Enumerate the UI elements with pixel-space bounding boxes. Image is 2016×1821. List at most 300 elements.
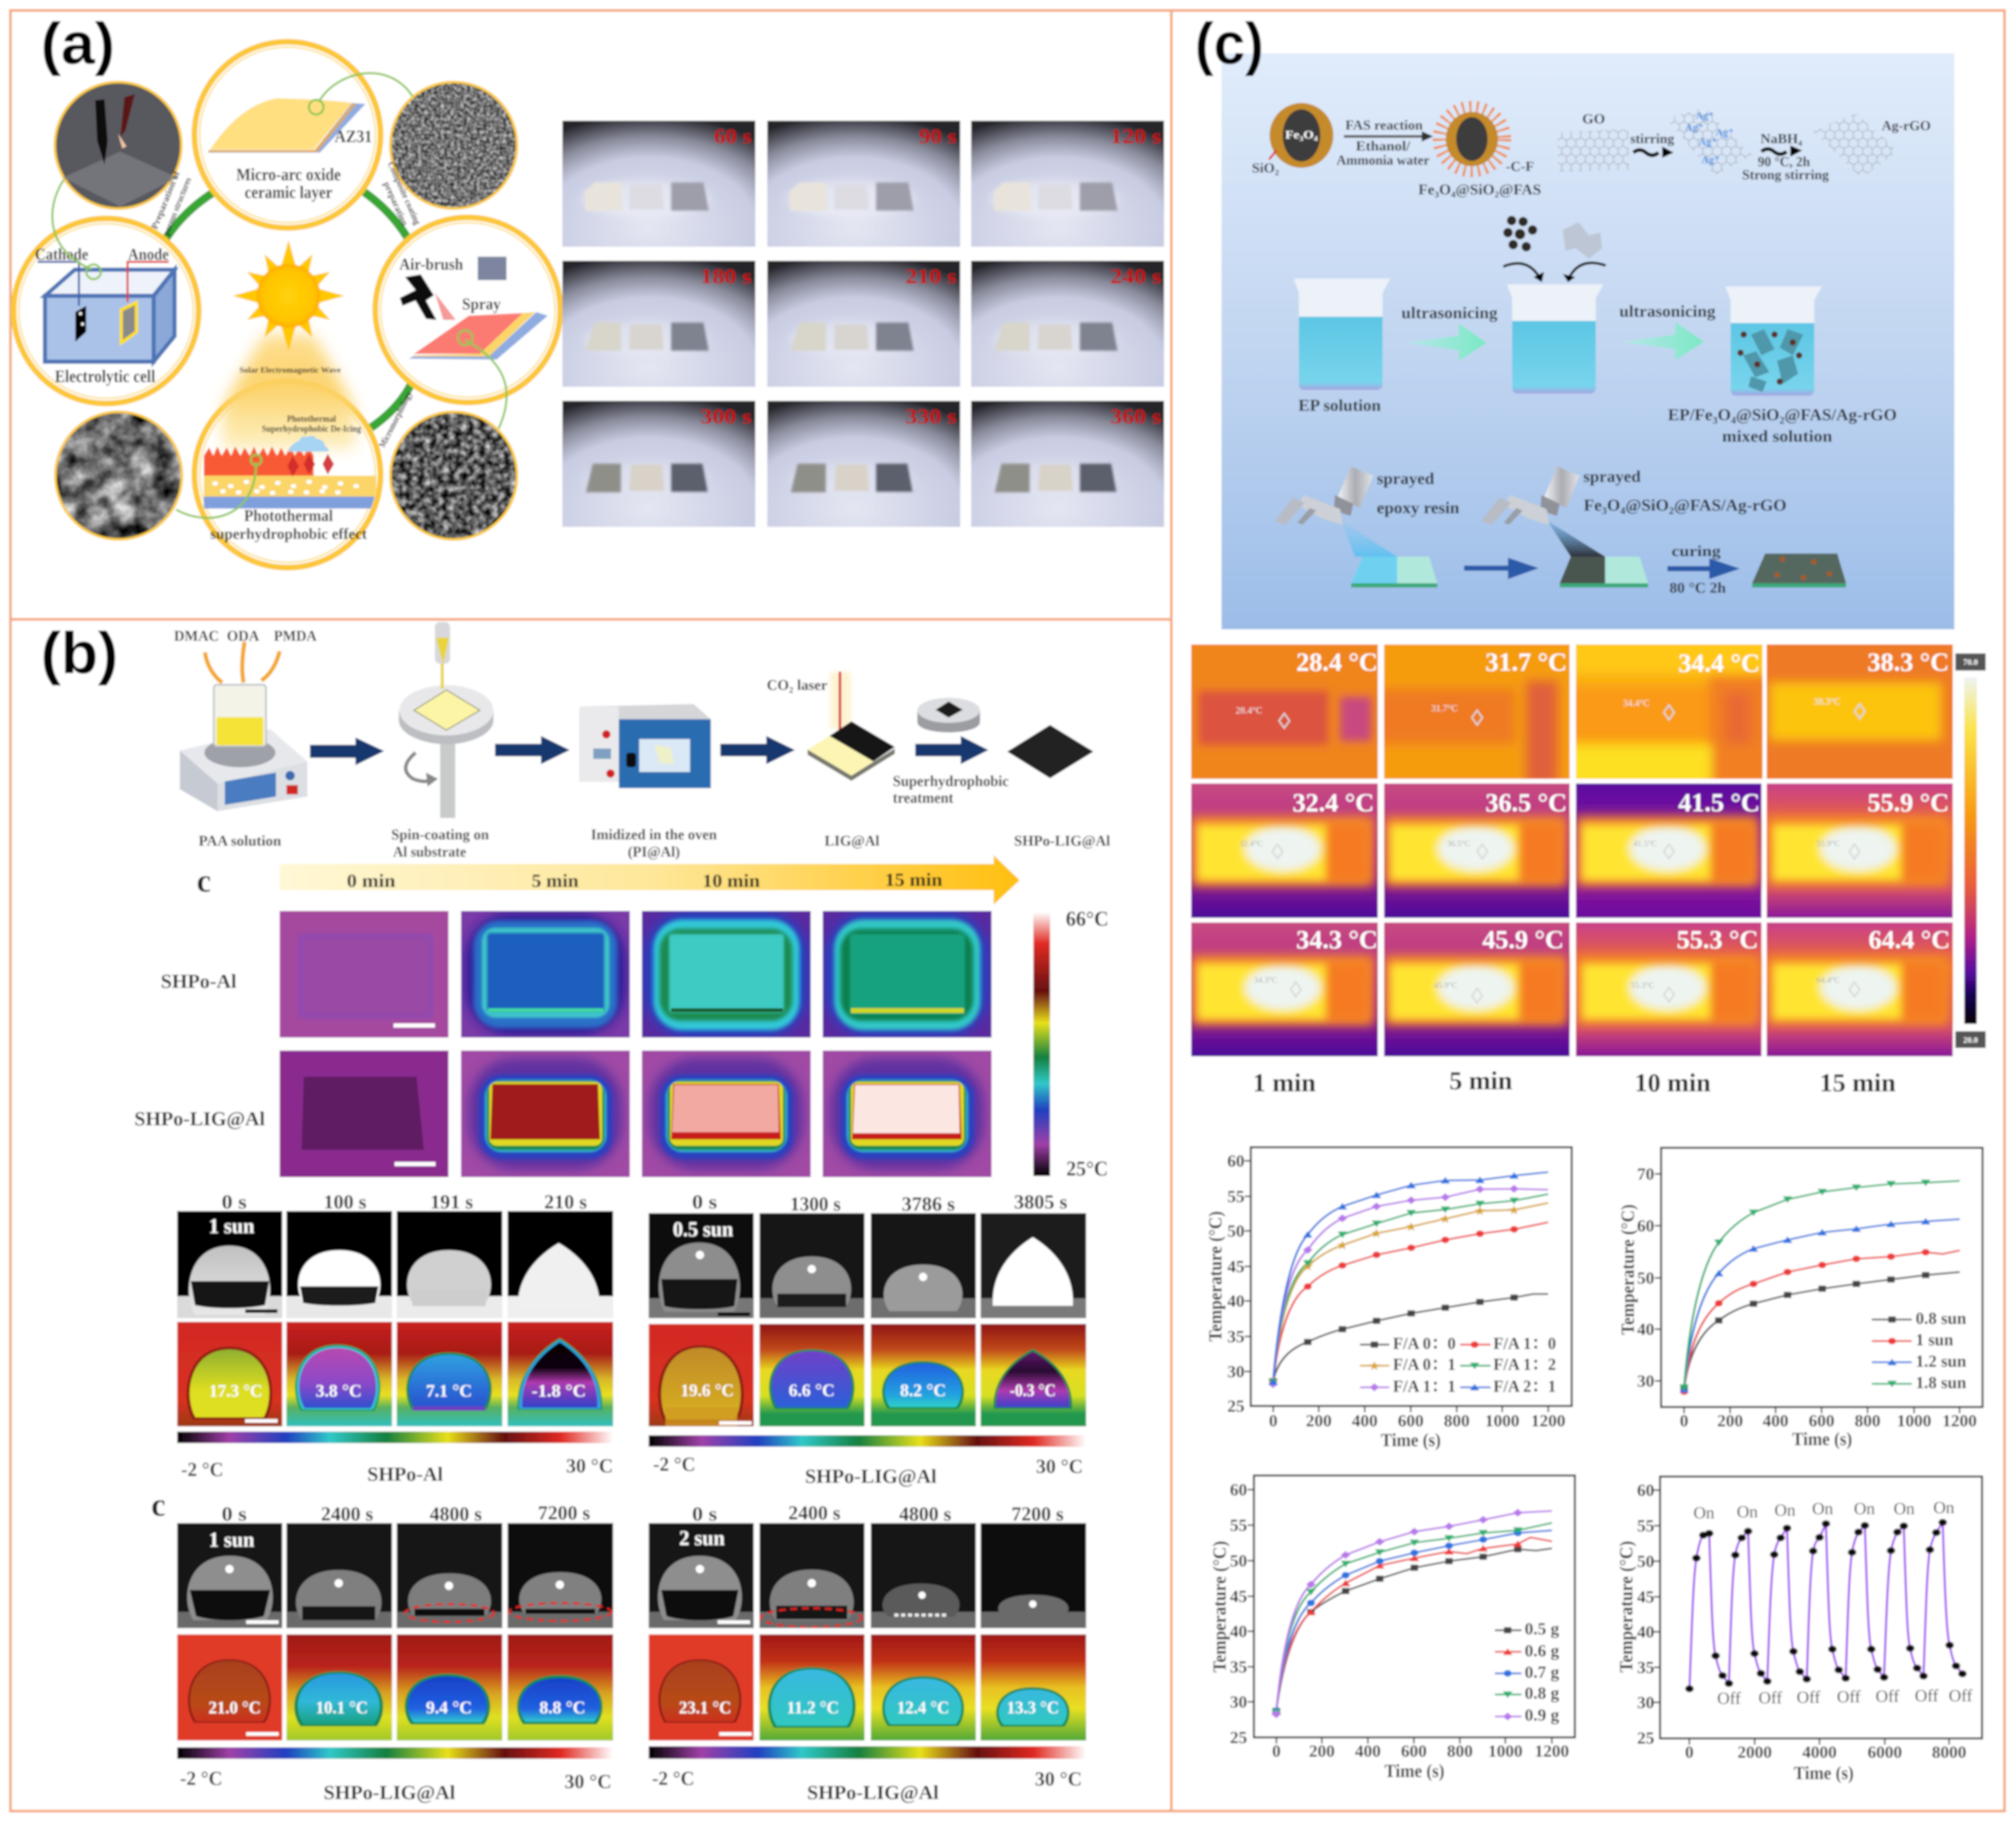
drop image 0 s (177, 1211, 282, 1318)
chart: temperature vs time by F/A ratio: 45 (1227, 1258, 1245, 1276)
label: second c: c (151, 1488, 166, 1523)
chart: temperature vs time by filler mass: 1000 (1488, 1742, 1523, 1761)
timeline arrow (280, 855, 1020, 905)
chart: on/off cycling: 4000 (1802, 1743, 1837, 1762)
drop image 7200 s (508, 1523, 613, 1628)
chart: on/off cycling: On (1694, 1504, 1714, 1523)
step labels: Spin-coating on (391, 827, 489, 843)
IR cell row 2 col 3: 41.5°C (1633, 839, 1657, 848)
infrared time labels: 10 min (1634, 1068, 1711, 1097)
labels: -2 °C (653, 1454, 695, 1476)
heading: (b): (b) (41, 620, 118, 686)
GO sheets scheme: Ag⁺ (1715, 127, 1734, 139)
chart: on/off cycling: On (1933, 1499, 1954, 1517)
chart: temperature vs time by filler mass: 60 (1230, 1481, 1247, 1500)
arrow 2 (495, 736, 570, 764)
FAS reaction arrow (1337, 118, 1433, 168)
IR cell row 1 col 4 (1767, 644, 1953, 779)
icon: SEM medium (390, 412, 517, 539)
photo 180 s: 180 s (700, 264, 752, 288)
time labels: 0 s (222, 1503, 247, 1525)
beaker: mixed solution: mixed solution (1722, 427, 1833, 445)
circle: electrolytic cell: Electrolytic cell (55, 367, 155, 386)
GO sheets scheme: NaBH₄ (1760, 131, 1802, 146)
chart: temperature vs time by filler mass: 40 (1230, 1622, 1247, 1641)
thermal drop 0 s (649, 1324, 754, 1426)
panel: (c) coating preparation, infrared maps and heating curves (1191, 11, 1986, 1783)
thermal drop 0 s (649, 1634, 754, 1741)
chart: on/off cycling: On (1894, 1500, 1915, 1518)
time labels: 3805 s (1014, 1191, 1067, 1213)
photo 330 s: 330 s (905, 405, 957, 428)
chart: on/off cycling: 25 (1637, 1729, 1654, 1748)
infrared colour bar: 70.0 (1963, 658, 1978, 667)
sun glow (222, 335, 355, 450)
infrared time labels: 15 min (1819, 1068, 1896, 1097)
labels: SHPo-LIG@Al (324, 1782, 455, 1804)
drop image 0 s: 1 sun (209, 1528, 254, 1551)
IR cell row 1 col 4: 38.3 °C (1868, 647, 1949, 676)
IR cell row 3 col 1 (1191, 923, 1378, 1056)
time labels (692, 1191, 1067, 1215)
thermal map: SHPo-Al 15 min (823, 911, 992, 1038)
chart: temperature vs time by sun intensity: Time (s) (1792, 1428, 1852, 1449)
chart: on/off cycling: Off (1837, 1688, 1861, 1707)
chart: temperature vs time by F/A ratio: F/A 1：1 (1393, 1377, 1456, 1396)
IR cell row 1 col 2: 31.7°C (1431, 703, 1458, 713)
chart: temperature vs time by F/A ratio: F/A 0：1 (1393, 1355, 1456, 1374)
filler particles and sheets (1503, 216, 1606, 282)
chart: temperature vs time by sun intensity: Temperature (°C) (1617, 1204, 1638, 1335)
step labels (199, 827, 1110, 860)
GO sheets scheme: Ag-rGO (1882, 118, 1931, 133)
process scheme (174, 622, 1110, 860)
circle: air-brush spray: Spray (462, 294, 501, 313)
chart: temperature vs time by filler mass: 35 (1230, 1658, 1247, 1677)
timeline arrow: 15 min (885, 869, 942, 890)
IR cell row 1 col 2 (1374, 644, 1570, 786)
IR cell row 1 col 3 (1565, 634, 1775, 791)
chart: temperature vs time by sun intensity: 50 (1637, 1269, 1654, 1288)
IR cell row 3 col 1: 34.3°C (1254, 976, 1277, 985)
arrow: ultrasonicing (1401, 303, 1497, 361)
thermal drop 2400 s: 11.2 °C (787, 1698, 839, 1718)
icon: disc with sample (917, 698, 980, 732)
chart: temperature vs time by filler mass: 0 (1272, 1742, 1281, 1761)
thermal drop 4800 s (871, 1634, 976, 1741)
drop image 1300 s (759, 1213, 865, 1318)
label: sub-panel c: c (197, 863, 211, 899)
labels (652, 1768, 1082, 1804)
reagents labels: PMDA (274, 628, 317, 644)
infrared grid (1191, 634, 1953, 1056)
photo 180 s (562, 261, 755, 387)
chart: temperature vs time by filler mass: 30 (1230, 1693, 1247, 1712)
icon: final black sample (1007, 725, 1093, 778)
IR cell row 2 col 3 (1576, 783, 1761, 918)
IR cell row 3 col 2: 45.9°C (1434, 981, 1457, 990)
chart: temperature vs time by sun intensity: 40 (1637, 1320, 1654, 1339)
chart: on/off cycling: 45 (1637, 1588, 1654, 1607)
infrared colour bar: 20.0 (1963, 1036, 1978, 1045)
photo 60 s: 60 s (714, 124, 752, 148)
time labels: 0 s (692, 1191, 717, 1213)
GO sheets scheme: Ag⁺ (1685, 122, 1703, 133)
chart: on/off cycling: 30 (1637, 1693, 1654, 1712)
IR cell row 1 col 1 (1191, 644, 1378, 779)
time labels (692, 1502, 1064, 1525)
heading: (a): (a) (41, 11, 115, 76)
chart: on/off cycling: Off (1875, 1687, 1899, 1706)
chart: temperature vs time by sun intensity: 1000 (1897, 1412, 1931, 1431)
GO sheets scheme: Ag⁺ (1696, 110, 1714, 122)
step labels: Imidized in the oven (591, 827, 717, 843)
thermal map: SHPo-Al 10 min (642, 911, 811, 1038)
GO sheets scheme: stirring (1630, 131, 1674, 146)
time labels: 0 s (222, 1191, 247, 1213)
panel: (a) micro-arc oxide scheme and de-icing photos (14, 11, 1164, 568)
chart: on/off cycling: 0 (1685, 1743, 1694, 1762)
photo 90 s (767, 121, 960, 247)
row labels: SHPo-LIG@Al (134, 1108, 265, 1130)
GO sheets scheme: Ag⁺ (1699, 136, 1717, 148)
FAS-modified particle (1419, 109, 1541, 198)
icon: spray gun and plate 2: Fe₃O₄@SiO₂@FAS/Ag-rGO (1584, 495, 1787, 514)
thermal drop 3805 s (981, 1324, 1086, 1426)
chart: on/off cycling: Time (s) (1794, 1762, 1853, 1783)
chart: temperature vs time by filler mass: 0.9 g (1525, 1706, 1560, 1725)
infrared time labels (1253, 1066, 1896, 1097)
droplet group: SHPo-Al 1 sun freezing (177, 1191, 613, 1485)
icon: sun (233, 240, 344, 352)
photo 240 s (971, 261, 1164, 387)
FAS reaction arrow: Ammonia water (1337, 153, 1430, 168)
chart: temperature vs time by sun intensity: 1 sun (1916, 1331, 1953, 1350)
thermal drop 0 s (177, 1634, 282, 1741)
chart: on/off cycling: On (1737, 1503, 1758, 1522)
thermal map: SHPo-Al 0 min (280, 911, 448, 1038)
photo 300 s (562, 401, 755, 527)
chart: on/off cycling: On (1854, 1500, 1875, 1518)
chart: temperature vs time by F/A ratio: 1200 (1531, 1412, 1565, 1431)
icon: oven (579, 704, 711, 788)
IR cell row 1 col 1: 28.4°C (1236, 705, 1262, 716)
photo 120 s: 120 s (1110, 124, 1161, 148)
chart: temperature vs time by filler mass: 600 (1401, 1742, 1427, 1761)
IR cell row 3 col 2 (1384, 923, 1570, 1056)
chart: temperature vs time by F/A ratio: 0 (1269, 1412, 1277, 1431)
chart: temperature vs time by F/A ratio: 800 (1444, 1412, 1470, 1431)
IR cell row 2 col 4: 55.9°C (1816, 839, 1840, 848)
labels (180, 1768, 612, 1804)
circle: micro-arc oxide ceramic layer: AZ31 (335, 127, 372, 146)
IR cell row 2 col 1 (1191, 783, 1378, 918)
circle: micro-arc oxide ceramic layer: Micro-arc oxide (236, 165, 341, 185)
chart: temperature vs time by sun intensity: 70 (1637, 1165, 1654, 1184)
icon: cell photo inset (55, 82, 181, 209)
time labels: 191 s (430, 1191, 473, 1213)
icon: spray gun and plate 1: sprayed (1377, 469, 1434, 488)
thermal drop 100 s (286, 1322, 392, 1426)
droplet group: defrost 1 sun (177, 1502, 613, 1804)
icon: spray gun and plate 2: sprayed (1583, 467, 1641, 486)
drop image 100 s (286, 1211, 392, 1318)
IR cell row 3 col 3: 55.3 °C (1677, 925, 1758, 954)
infrared time labels: 5 min (1449, 1066, 1513, 1095)
vertical colour bar (1033, 907, 1109, 1180)
thermal drop 1300 s (759, 1324, 865, 1426)
thermal map: SHPo-LIG@Al 0 min (280, 1051, 448, 1177)
chart: temperature vs time by sun intensity (1617, 1148, 1983, 1449)
thermal drop 210 s (508, 1322, 613, 1426)
icon: spray gun and plate 1 (1275, 466, 1459, 587)
chart: temperature vs time by filler mass (1209, 1476, 1575, 1781)
photo grid: de-icing time series (562, 121, 1164, 527)
vertical colour bar: 25°C (1066, 1157, 1108, 1180)
thin green connectors (52, 73, 506, 518)
chart: temperature vs time by filler mass: 50 (1230, 1552, 1247, 1571)
arrow: curing: 80 °C 2h (1669, 580, 1726, 596)
time labels (222, 1191, 587, 1213)
step labels: LIG@Al (825, 833, 880, 849)
step labels: (PI@Al) (628, 844, 680, 860)
drop image 0 s: 1 sun (209, 1214, 254, 1238)
time labels: 3786 s (902, 1193, 955, 1215)
chart: on/off cycling: Temperature (°C) (1616, 1541, 1637, 1673)
chart: temperature vs time by sun intensity: 60 (1637, 1217, 1654, 1236)
IR cell row 3 col 4: 64.4°C (1816, 976, 1840, 985)
chart: temperature vs time by F/A ratio: 40 (1227, 1292, 1245, 1311)
arrow 3 (720, 736, 795, 764)
thermal map: SHPo-LIG@Al 5 min (461, 1051, 630, 1177)
chart: temperature vs time by filler mass: 800 (1447, 1742, 1473, 1761)
drop image 191 s (397, 1211, 502, 1318)
colour bar (177, 1747, 613, 1759)
chart: on/off cycling: Off (1717, 1689, 1741, 1708)
chart: on/off cycling: 6000 (1868, 1743, 1902, 1762)
drop image 210 s (508, 1211, 613, 1318)
thermal drop 7200 s: 13.3 °C (1007, 1698, 1059, 1718)
arrow: curing (1667, 543, 1740, 596)
beaker: mixing (1507, 284, 1604, 394)
chart: temperature vs time by sun intensity: 1.8 sun (1916, 1374, 1966, 1392)
icon: SEM fine (390, 82, 517, 209)
chart: temperature vs time by F/A ratio: 60 (1227, 1152, 1245, 1171)
drop image 0 s (177, 1523, 282, 1628)
drop image 0 s (649, 1523, 754, 1628)
label: de-icing: Photothermal (287, 413, 336, 424)
heading: (c): (c) (1195, 11, 1264, 76)
arc labels: preparation (382, 180, 410, 227)
chart: temperature vs time by F/A ratio: F/A 2：1 (1493, 1377, 1556, 1396)
colour bar (177, 1432, 613, 1443)
chart: temperature vs time by filler mass: 1200 (1535, 1742, 1569, 1761)
thermal drop 2400 s (286, 1634, 392, 1741)
chart: temperature vs time by F/A ratio: F/A 0：0 (1393, 1334, 1456, 1353)
chart: temperature vs time by sun intensity: 0 (1680, 1412, 1688, 1431)
droplet group: defrost 2 sun (649, 1502, 1086, 1804)
photo 210 s: 210 s (905, 264, 957, 288)
step label: superhydrophobic treatment (893, 773, 1009, 806)
time labels: 0 s (692, 1503, 717, 1525)
time labels: 210 s (544, 1191, 587, 1213)
timeline arrow: 10 min (702, 870, 760, 891)
IR cell row 3 col 3 (1576, 923, 1761, 1056)
time labels: 2400 s (321, 1503, 373, 1525)
chart: temperature vs time by F/A ratio: 55 (1227, 1188, 1245, 1206)
reagents labels (174, 628, 317, 644)
IR cell row 1 col 4: 38.3°C (1814, 696, 1840, 707)
beaker: mixed solution: EP/Fe₃O₄@SiO₂@FAS/Ag-rGO (1668, 405, 1897, 424)
IR cell row 2 col 2: 36.5°C (1447, 839, 1470, 848)
IR cell row 3 col 2: 45.9 °C (1482, 925, 1564, 954)
GO sheets scheme: GO (1582, 111, 1605, 126)
IR cell row 1 col 3: 34.4 °C (1678, 648, 1760, 677)
drop image 3805 s (981, 1213, 1086, 1318)
infrared colour bar (1955, 653, 1986, 1048)
photo 120 s (971, 121, 1164, 247)
GO sheets scheme: 90 °C, 2h (1758, 154, 1811, 169)
thermal drop 2400 s: 10.1 °C (316, 1698, 368, 1718)
IR cell row 3 col 4 (1767, 923, 1953, 1056)
photo 330 s (767, 401, 960, 527)
icon: spin coater (399, 622, 493, 818)
colour bar (649, 1435, 1086, 1447)
arrow: to spray 2 (1464, 558, 1539, 579)
droplet group: SHPo-LIG@Al 0.5 sun freezing (649, 1191, 1086, 1488)
IR cell row 3 col 1: 34.3 °C (1296, 925, 1378, 954)
IR cell row 2 col 1: 32.4 °C (1293, 788, 1374, 817)
chart: temperature vs time by filler mass: Time (s) (1384, 1760, 1445, 1781)
thermal drop 7200 s (981, 1634, 1086, 1741)
drop image 2400 s (286, 1523, 392, 1628)
infrared time labels: 1 min (1253, 1068, 1316, 1097)
GO sheets scheme: Ag⁺ (1701, 154, 1720, 166)
drop image 7200 s (981, 1523, 1086, 1628)
thermal drop 1300 s: 6.6 °C (789, 1381, 835, 1400)
labels (181, 1455, 613, 1485)
IR cell row 2 col 4 (1767, 783, 1953, 918)
circle: electrolytic cell: Cathode (35, 245, 88, 263)
circle: air-brush spray (375, 217, 560, 402)
beaker: EP solution: EP solution (1298, 396, 1381, 414)
chart: on/off cycling: 40 (1637, 1623, 1654, 1642)
chart: temperature vs time by filler mass: 200 (1309, 1742, 1335, 1761)
thermal drop 4800 s (397, 1634, 502, 1741)
labels (653, 1454, 1083, 1488)
drop image 4800 s (871, 1523, 976, 1628)
thermal drop 0 s: 21.0 °C (209, 1698, 261, 1718)
circle: micro-arc oxide ceramic layer (194, 42, 381, 228)
chart: on/off cycling: Off (1796, 1688, 1821, 1707)
photo 210 s (767, 261, 960, 387)
reagents labels: ODA (227, 628, 260, 644)
step label: superhydrophobic treatment: Superhydrophobic (893, 773, 1009, 790)
circle: photothermal superhydrophobic effect: Photothermal (244, 506, 333, 525)
circle: electrolytic cell: Anode (128, 245, 169, 263)
Fe3O4@SiO2 particle: Fe₃O₄ (1285, 128, 1318, 141)
arrow 1 (310, 737, 384, 765)
time labels: 2400 s (788, 1502, 840, 1524)
chart: temperature vs time by F/A ratio: F/A 1：0 (1493, 1334, 1556, 1353)
chart: temperature vs time by sun intensity: 0.8 sun (1916, 1309, 1966, 1328)
IR cell row 1 col 3: 34.4°C (1623, 698, 1650, 708)
circle: photothermal superhydrophobic effect (194, 335, 381, 568)
chart: temperature vs time by filler mass: 400 (1355, 1742, 1381, 1761)
chart: temperature vs time by filler mass: 55 (1230, 1516, 1247, 1535)
chart: on/off cycling: 60 (1637, 1481, 1654, 1500)
thermal drop 0 s: 19.6 °C (681, 1381, 734, 1400)
chart: temperature vs time by F/A ratio: 1000 (1485, 1412, 1519, 1431)
labels: SHPo-Al (367, 1463, 443, 1485)
thermal drop 3805 s: -0.3 °C (1010, 1381, 1056, 1400)
label: de-icing: Superhydrophobic De-Icing (262, 423, 361, 434)
thermal drop 0 s: 17.3 °C (209, 1381, 262, 1401)
chart: temperature vs time by sun intensity: 30 (1637, 1372, 1654, 1391)
thermal map: SHPo-LIG@Al 10 min (642, 1051, 811, 1177)
FAS reaction arrow: Ethanol/ (1356, 139, 1411, 154)
chart: temperature vs time by sun intensity: 800 (1854, 1412, 1881, 1431)
circle: photothermal superhydrophobic effect: superhydrophobic effect (210, 525, 367, 543)
arc labels (149, 160, 423, 449)
vertical colour bar: 66°C (1066, 907, 1109, 930)
chart: on/off cycling: Off (1915, 1687, 1939, 1705)
FAS reaction arrow: FAS reaction (1345, 118, 1423, 133)
chart: on/off cycling: 35 (1637, 1658, 1654, 1677)
labels: SHPo-LIG@Al (807, 1782, 939, 1804)
photo 360 s: 360 s (1110, 405, 1161, 428)
SEM rings (55, 82, 517, 539)
circle: air-brush spray: Air-brush (399, 255, 463, 273)
FAS-modified particle: -C-F (1506, 159, 1534, 174)
icon: SEM coarse (55, 412, 182, 539)
chart: on/off cycling: On (1775, 1501, 1795, 1520)
drop image 4800 s (397, 1523, 502, 1628)
time labels: 4800 s (430, 1503, 482, 1525)
arrow: ultrasonicing: ultrasonicing (1401, 303, 1497, 322)
labels: 30 °C (566, 1455, 613, 1477)
arrow: ultrasonicing 2 (1619, 302, 1715, 360)
chart: on/off cycling: 2000 (1737, 1743, 1772, 1762)
IR cell row 1 col 2: 31.7 °C (1485, 647, 1567, 676)
beaker: mixed solution (1668, 286, 1897, 445)
photo 300 s: 300 s (700, 405, 752, 428)
row labels (134, 971, 265, 1130)
chart: temperature vs time by F/A ratio: Time (s) (1381, 1430, 1441, 1450)
chart: temperature vs time by F/A ratio: 35 (1227, 1328, 1245, 1346)
colour bar (649, 1746, 1086, 1759)
icon: cured coating (1752, 554, 1846, 587)
icon: CO2 laser on sample: CO₂ laser (767, 677, 827, 694)
labels: 30 °C (1035, 1768, 1082, 1790)
GO sheets scheme (1557, 107, 1931, 182)
chart: temperature vs time by F/A ratio: 30 (1227, 1363, 1245, 1381)
chart: temperature vs time by F/A ratio: F/A 1：2 (1493, 1355, 1556, 1374)
photo 360 s (971, 401, 1164, 527)
time labels: 7200 s (538, 1502, 590, 1524)
time labels: 7200 s (1011, 1503, 1064, 1525)
chart: temperature vs time by F/A ratio: 600 (1398, 1412, 1424, 1431)
chart: temperature vs time by F/A ratio: 25 (1227, 1397, 1245, 1416)
arc labels: Composite coating (386, 160, 423, 226)
labels: -2 °C (181, 1459, 224, 1481)
photo 90 s: 90 s (919, 124, 957, 148)
chart: on/off cycling: On (1812, 1500, 1833, 1518)
thermal drop 4800 s: 12.4 °C (897, 1698, 949, 1718)
arc labels: Micromorphology (377, 389, 414, 449)
green ring arcs connecting steps (165, 192, 412, 428)
labels: 30 °C (565, 1771, 612, 1793)
